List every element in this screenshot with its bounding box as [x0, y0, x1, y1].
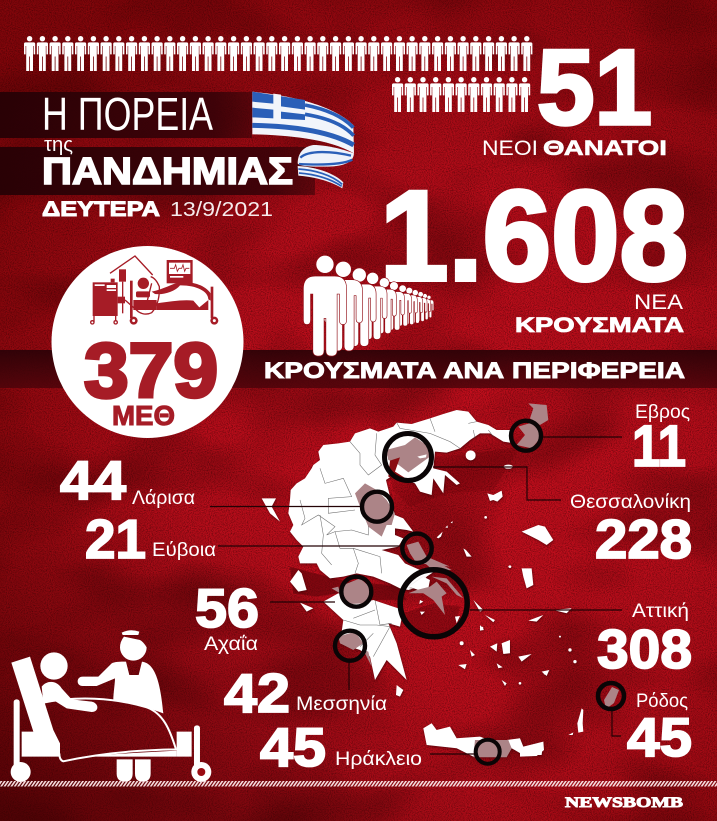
- label: Evia: [85, 508, 216, 570]
- icon: ICU bed: [90, 256, 218, 325]
- label: Evia: 21: [85, 508, 146, 570]
- icon: Greek flag ribbon: [252, 92, 354, 188]
- icon: doctor: [78, 630, 163, 782]
- map: mainland north: [288, 410, 515, 592]
- heading: cases by region: ΚΡΟΥΣΜΑΤΑ ΑΝΑ ΠΕΡΙΦΕΡΕΙΑ: [264, 358, 685, 383]
- date line: 13/9/2021: [170, 199, 273, 221]
- label: Heraklion: [260, 716, 422, 778]
- map: Greece: [262, 403, 619, 757]
- label: Thessaloniki: 228: [595, 508, 692, 570]
- title band lower: [0, 147, 315, 195]
- label: Larisa: 44: [60, 449, 126, 511]
- label: Attica: 308: [597, 618, 692, 680]
- map: Rhodes island: [604, 687, 619, 709]
- title: της: της: [44, 134, 73, 156]
- label: Larisa: [60, 449, 195, 511]
- number: deaths: 51: [537, 27, 652, 147]
- label: Evros: Εβρος: [635, 402, 690, 423]
- leader lines: [210, 437, 622, 754]
- title band upper: [0, 92, 252, 138]
- number: new cases: 1.608: [380, 165, 688, 308]
- label: Heraklion: Ηράκλειο: [335, 749, 422, 770]
- label: new deaths: ΘΑΝΑΤΟΙ: [543, 137, 667, 160]
- dark band: regional heading: [0, 350, 717, 388]
- label: new cases: ΝΕΑ: [634, 291, 683, 314]
- icon: queue of people: [303, 255, 434, 356]
- map: highlighted regions: [355, 437, 450, 567]
- hatched ground line: [0, 781, 717, 786]
- label: Achaia: 56: [195, 577, 259, 639]
- map: Peloponnese borders: [343, 600, 392, 657]
- map: Thessaloniki inner detail: [388, 454, 427, 482]
- icon: patient: [11, 652, 211, 782]
- label: Rhodes: 45: [627, 706, 692, 768]
- label: new deaths: [482, 137, 667, 160]
- date line: [42, 198, 273, 221]
- label: Evia: Εύβοια: [152, 540, 216, 561]
- map: far eastern islands: [520, 708, 583, 757]
- label: Thessaloniki: Θεσσαλονίκη: [570, 492, 691, 513]
- icon row: deaths pictogram row 2: [392, 77, 530, 112]
- label: ICU: ΜΕΘ: [112, 400, 175, 431]
- icon: patient and doctor: [11, 630, 211, 782]
- date line: ΔΕΥΤΕΡΑ: [42, 198, 160, 221]
- highlight circles: [335, 421, 624, 764]
- label: new deaths: ΝΕΟΙ: [482, 137, 538, 160]
- title: Η ΠΟΡΕΙΑ: Η ΠΟΡΕΙΑ: [42, 88, 213, 140]
- icon row: deaths pictogram row 1: [24, 36, 532, 71]
- panel: ICU circle: [52, 246, 244, 438]
- label: Evros: 11: [632, 414, 686, 479]
- label: new cases: [515, 291, 684, 337]
- map: regional borders: [300, 418, 493, 573]
- logo: Newsbomb: NEWSBOMB: [565, 795, 683, 811]
- label: new cases: ΚΡΟΥΣΜΑΤΑ: [515, 314, 684, 337]
- label: Messinia: 42: [224, 662, 290, 724]
- label: Attica: Αττική: [632, 601, 689, 622]
- label: Rhodes: Ρόδος: [636, 691, 688, 712]
- label: Thessaloniki: [570, 492, 692, 570]
- map: dark gulfs: [290, 447, 520, 637]
- map: Peloponnese, Crete and islands: [262, 498, 577, 757]
- label: Messinia: [224, 662, 387, 724]
- label: Heraklion: 45: [260, 716, 326, 778]
- map: highlighted regions south: [332, 403, 548, 757]
- label: Achaia: Αχαΐα: [204, 634, 258, 655]
- label: Messinia: Μεσσηνία: [296, 694, 387, 715]
- label: Larisa: Λάρισα: [132, 488, 195, 509]
- number: ICU patients: 379: [84, 328, 218, 414]
- title: ΠΑΝΔΗΜΙΑΣ: ΠΑΝΔΗΜΙΑΣ: [42, 151, 293, 193]
